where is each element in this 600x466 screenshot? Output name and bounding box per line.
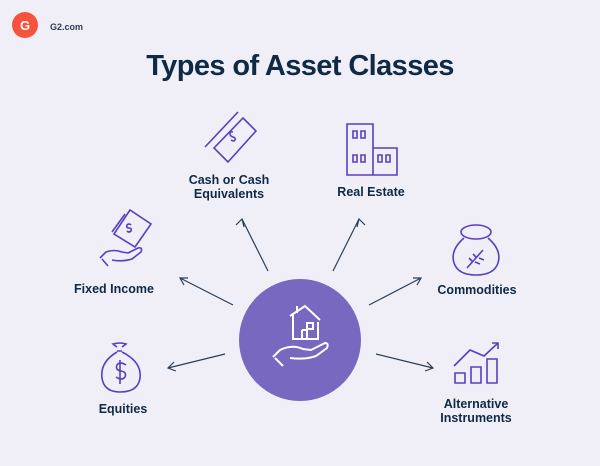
item: fixed income — [74, 210, 154, 296]
item: fixed income: Fixed Income — [74, 282, 154, 296]
item: commodities — [437, 225, 517, 297]
item: commodities: Commodities — [437, 283, 517, 297]
title: Types of Asset Classes — [146, 50, 454, 82]
item: equities — [99, 343, 147, 416]
item: cash — [189, 112, 269, 201]
item: cash: Cash or Cash — [189, 173, 269, 187]
logo: G2.com — [50, 22, 83, 32]
arrows — [168, 219, 433, 371]
logo: G — [20, 18, 30, 33]
item: equities: Equities — [99, 402, 147, 416]
center circle with house-in-hand icon — [239, 279, 361, 401]
item: alternative instruments: Alternative — [444, 397, 508, 411]
logo — [12, 12, 83, 38]
item: cash: Equivalents — [194, 187, 264, 201]
item: real estate — [337, 124, 405, 199]
item: alternative instruments — [440, 343, 512, 425]
item: real estate: Real Estate — [337, 185, 405, 199]
item: alternative instruments: Instruments — [440, 411, 512, 425]
